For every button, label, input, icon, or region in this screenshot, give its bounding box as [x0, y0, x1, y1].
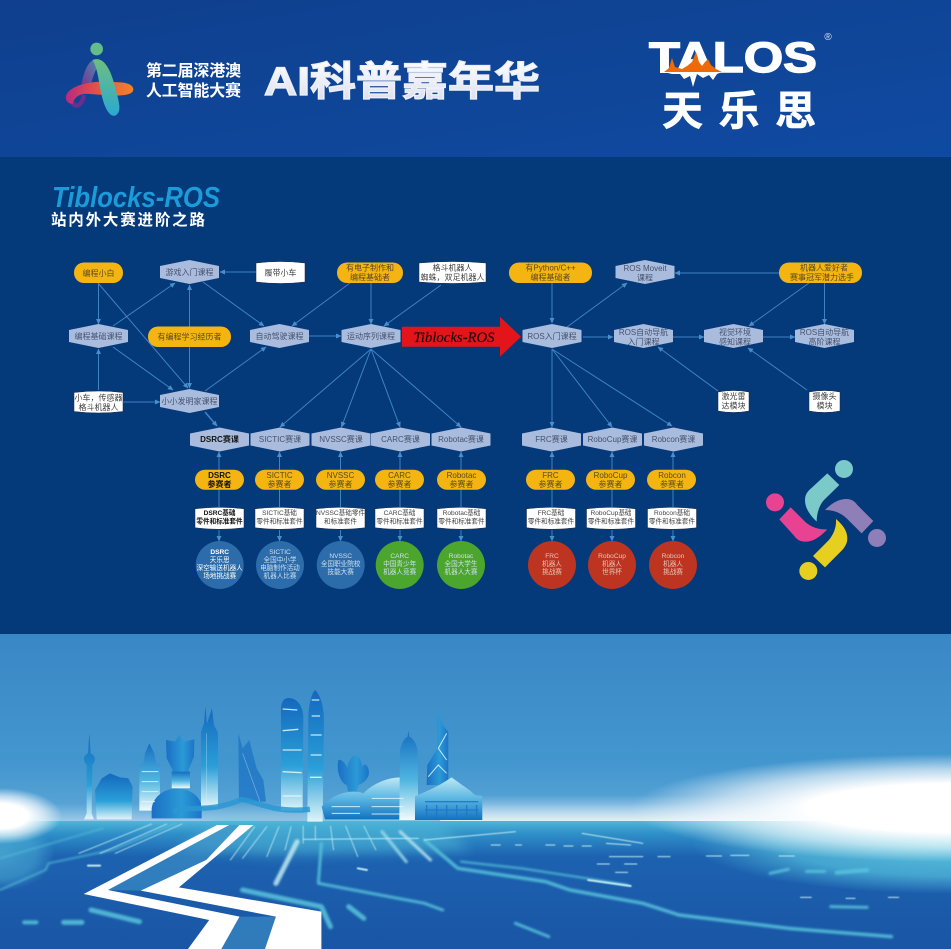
column: NVSSC: 参赛者: [328, 479, 352, 489]
course: 视觉环境感知课程: 视觉环境: [719, 327, 751, 337]
left ground cyan glow: [0, 819, 55, 891]
column: SICTIC: SICTIC赛课: [259, 434, 301, 444]
module: 摄像头模块: [809, 390, 840, 412]
building: twin tower right: [307, 690, 324, 822]
column: SICTIC: SICTIC: [266, 471, 293, 480]
course: 小小发明家课程: 小小发明家课程: [162, 396, 218, 406]
column: NVSSC: 和标准套件: [324, 516, 357, 526]
panel: roadmap background: [0, 157, 951, 634]
column: DSRC: 深空输送机器人: [197, 563, 243, 572]
column: Robcon: Robcon: [658, 471, 686, 480]
column: DSRC: DSRC: [210, 549, 229, 556]
column: SICTIC: 参赛者: [268, 479, 292, 489]
building: stepped tower: [139, 743, 160, 811]
pill: 有Python/C++编程基础者: 有Python/C++: [525, 262, 576, 272]
column: RoboCup: RoboCup赛课: [588, 434, 637, 444]
icon: TALOS logo: TALOS: [649, 34, 817, 82]
pill: 有编程学习经历者: [148, 326, 231, 347]
course: ROS自动导航入门课程: [614, 324, 673, 348]
course: 自动驾驶课程: 自动驾驶课程: [256, 331, 304, 341]
subtitle: 站内外大赛进阶之路: [51, 210, 205, 229]
column: NVSSC: [312, 428, 370, 589]
column: DSRC: DSRC: [208, 471, 231, 480]
module: 激光雷达模块: 激光雷: [722, 391, 746, 401]
course: ROS Moveit课程: ROS Moveit: [623, 264, 667, 273]
logo text: 天乐思: 天乐思: [662, 88, 816, 134]
pill: 有编程学习经历者: 有编程学习经历者: [158, 332, 222, 342]
column: FRC: FRC赛课: [535, 434, 568, 444]
pill: 有电子制作和编程基础者: [337, 262, 403, 283]
icon: four-figure pinwheel logo: [766, 460, 886, 580]
column: RoboCup: 零件和标准套件: [588, 516, 634, 526]
logo text: 第二届深港澳 人工智能大赛: [146, 61, 241, 100]
casino stem highlight: [172, 772, 190, 788]
column: Robcon: [644, 428, 703, 589]
course: 视觉环境感知课程: [704, 324, 763, 348]
building: glass dome: [152, 788, 202, 818]
column: RoboCup: RoboCup: [598, 553, 626, 560]
icon: TALOS logo: [649, 32, 832, 87]
column: NVSSC: 全国职业院校: [321, 559, 361, 568]
pill: 编程小白: [74, 262, 123, 283]
column: FRC: 参赛者: [538, 479, 562, 489]
module: 摄像头模块: 模块: [816, 400, 832, 410]
column: CARC: 中国青少年: [383, 559, 417, 568]
building: tall spire tower: [201, 707, 218, 807]
course: 编程基础课程: 编程基础课程: [74, 331, 122, 341]
column: Robcon: Robcon赛课: [652, 434, 695, 444]
course: ROS自动导航高阶课程: ROS自动导航: [800, 327, 849, 337]
column: Robcon: 零件和标准套件: [649, 516, 695, 526]
building: domed tower: [399, 731, 418, 820]
column: DSRC: [190, 428, 249, 589]
column: SICTIC: SICTIC基础: [262, 508, 297, 517]
column: NVSSC: NVSSC赛课: [319, 434, 363, 444]
column: NVSSC: NVSSC基础零件: [316, 508, 365, 517]
column: Robotac: 参赛者: [450, 479, 474, 489]
column: CARC: CARC: [390, 553, 409, 560]
illustration: city skyline: [84, 690, 482, 822]
building: tulip pavilion: [338, 756, 369, 792]
pill: 有电子制作和编程基础者: 编程基础者: [350, 272, 390, 282]
building: colonnade hall: [415, 777, 482, 820]
column: FRC: [522, 428, 581, 589]
column: CARC: CARC赛课: [381, 434, 420, 444]
icon: TALOS logo: ®: [824, 32, 832, 43]
column: CARC: 机器人竞赛: [383, 567, 417, 576]
course: 视觉环境感知课程: 感知课程: [719, 336, 751, 346]
column: FRC: 挑战赛: [542, 567, 562, 576]
column: Robotac: 机器人大赛: [445, 567, 478, 576]
course: ROS Moveit课程: 课程: [637, 274, 653, 282]
column: Robotac: [432, 428, 490, 589]
horizon light band: [440, 795, 951, 821]
course: 运动序列课程: 运动序列课程: [347, 331, 395, 341]
building: arched hall: [322, 777, 410, 819]
column: RoboCup: RoboCup基础: [590, 508, 632, 517]
column: CARC: 零件和标准套件: [376, 516, 423, 526]
course: 自动驾驶课程: [250, 324, 309, 348]
column: DSRC: 天乐思: [210, 555, 230, 564]
column: SICTIC: 电脑制作活动: [260, 563, 300, 572]
skyline highlights: [142, 700, 478, 820]
column: FRC: 零件和标准套件: [528, 516, 574, 526]
icon: AI carnival logo: [66, 43, 133, 116]
column: RoboCup: 机器人: [602, 559, 622, 568]
illustration: circuit traces: [0, 823, 899, 937]
pill: 有Python/C++编程基础者: 编程基础者: [530, 272, 570, 282]
column: RoboCup: [583, 428, 642, 589]
column: Robcon: Robcon基础: [654, 508, 690, 517]
heading: AI科普嘉年华: AI科普嘉年华: [264, 60, 540, 104]
column: Robotac: Robotac: [447, 471, 476, 480]
building: Bank of China: [427, 708, 448, 785]
arrow: Tiblocks-ROS: Tiblocks-ROS: [414, 330, 495, 346]
column: Robotac: 零件和标准套件: [438, 516, 485, 526]
course: ROS入门课程: [522, 324, 582, 348]
column: RoboCup: RoboCup: [594, 471, 628, 480]
module: 格斗机器人: [419, 262, 486, 284]
course: ROS自动导航入门课程: 入门课程: [628, 336, 660, 346]
pill: 有Python/C++编程基础者: [509, 262, 592, 283]
column: RoboCup: 世界杯: [602, 567, 622, 576]
course: 游戏入门课程: [160, 260, 219, 284]
title: Tiblocks-ROS: Tiblocks-ROS: [52, 182, 221, 214]
module: 履带小车: 履带小车: [264, 268, 296, 278]
course: 编程基础课程: [69, 324, 128, 348]
pill: 机器人爱好者: [779, 262, 862, 283]
course: ROS Moveit课程: [616, 260, 674, 284]
logo text: 第二届深港澳 人工智能大赛: 人工智能大赛: [146, 81, 241, 100]
building: lotus casino: [166, 735, 194, 789]
building: TV tower: [84, 733, 95, 819]
panel: circuit board ground: [0, 821, 951, 949]
building: church facade: [95, 773, 133, 819]
column: SICTIC: 全国中小学: [264, 555, 297, 564]
building: twin tower left: [281, 698, 303, 811]
arrow: Tiblocks-ROS: [402, 317, 521, 357]
logo text: 第二届深港澳 人工智能大赛: 第二届深港澳: [146, 61, 241, 80]
pill: 有电子制作和编程基础者: 有电子制作和: [346, 262, 394, 272]
column: FRC: FRC基础: [538, 508, 565, 517]
header band: [0, 0, 951, 157]
module: 激光雷达模块: 达模块: [722, 400, 746, 410]
column: Robotac: Robotac: [449, 553, 474, 560]
column: CARC: CARC基础: [384, 508, 416, 517]
pill: 机器人爱好者: 机器人爱好者: [800, 262, 848, 272]
module: 小车，传感器: 小车，传感器: [74, 392, 122, 402]
module: 小车，传感器: [74, 391, 123, 413]
course: 游戏入门课程: 游戏入门课程: [166, 267, 214, 277]
column: RoboCup: 参赛者: [598, 479, 622, 489]
column: FRC: FRC: [545, 553, 559, 560]
panel: city skyline background: [0, 634, 951, 822]
module: 履带小车: [256, 262, 305, 284]
column: Robcon: 挑战赛: [663, 567, 683, 576]
illustration: white circuit highways: [84, 825, 321, 949]
building: stepped sail: [238, 733, 266, 802]
pill: 编程小白: 编程小白: [82, 268, 114, 278]
column: Robcon: Robcon: [662, 553, 685, 560]
column: SICTIC: 机器人比赛: [264, 571, 297, 580]
column: SICTIC: 零件和标准套件: [256, 516, 303, 526]
column: DSRC: DSRC赛课: [200, 434, 239, 444]
column: DSRC: DSRC基础: [204, 508, 236, 517]
course: ROS入门课程: ROS入门课程: [527, 331, 577, 341]
right ground cyan glow: [691, 790, 951, 894]
module: 格斗机器人: 格斗机器人: [432, 262, 472, 272]
module: 激光雷达模块: [718, 390, 749, 412]
course: ROS自动导航高阶课程: 高阶课程: [808, 336, 840, 346]
module: 小车，传感器: 格斗机器人: [78, 402, 118, 412]
column: DSRC: 场地挑战赛: [203, 571, 237, 580]
column: FRC: 机器人: [542, 559, 562, 568]
pill: 机器人爱好者: 赛事冠军潜力选手: [790, 272, 854, 282]
column: NVSSC: NVSSC: [327, 471, 355, 480]
column: CARC: CARC: [388, 471, 411, 480]
module: 摄像头模块: 摄像头: [812, 391, 836, 401]
column: Robotac: 全国大学生: [445, 559, 478, 568]
course: 小小发明家课程: [160, 389, 219, 413]
column: DSRC: 参赛者: [208, 479, 232, 489]
column: FRC: FRC: [542, 471, 559, 480]
column: DSRC: 零件和标准套件: [196, 516, 243, 526]
column: CARC: 参赛者: [388, 479, 412, 489]
flow connectors: [98, 272, 824, 541]
column: NVSSC: 技能大赛: [328, 567, 354, 576]
column: Robotac: Robotac基础: [443, 508, 481, 517]
column: SICTIC: SICTIC: [269, 549, 291, 556]
course: ROS自动导航高阶课程: [795, 324, 854, 348]
course: 运动序列课程: [342, 324, 400, 348]
illustration: textured fill between highways: [108, 825, 276, 949]
course: ROS自动导航入门课程: ROS自动导航: [619, 327, 668, 337]
column: SICTIC: [250, 428, 310, 589]
column: CARC: [371, 428, 430, 589]
central ground light haze: [180, 822, 470, 856]
module: 格斗机器人: 蜘蛛，双足机器人: [420, 272, 484, 282]
right horizon glow: [631, 754, 951, 862]
column: Robcon: 机器人: [663, 559, 683, 568]
column: NVSSC: NVSSC: [329, 553, 352, 560]
column: Robotac: Robotac赛课: [438, 434, 484, 444]
column: Robcon: 参赛者: [660, 479, 684, 489]
left horizon glow: [0, 788, 62, 844]
